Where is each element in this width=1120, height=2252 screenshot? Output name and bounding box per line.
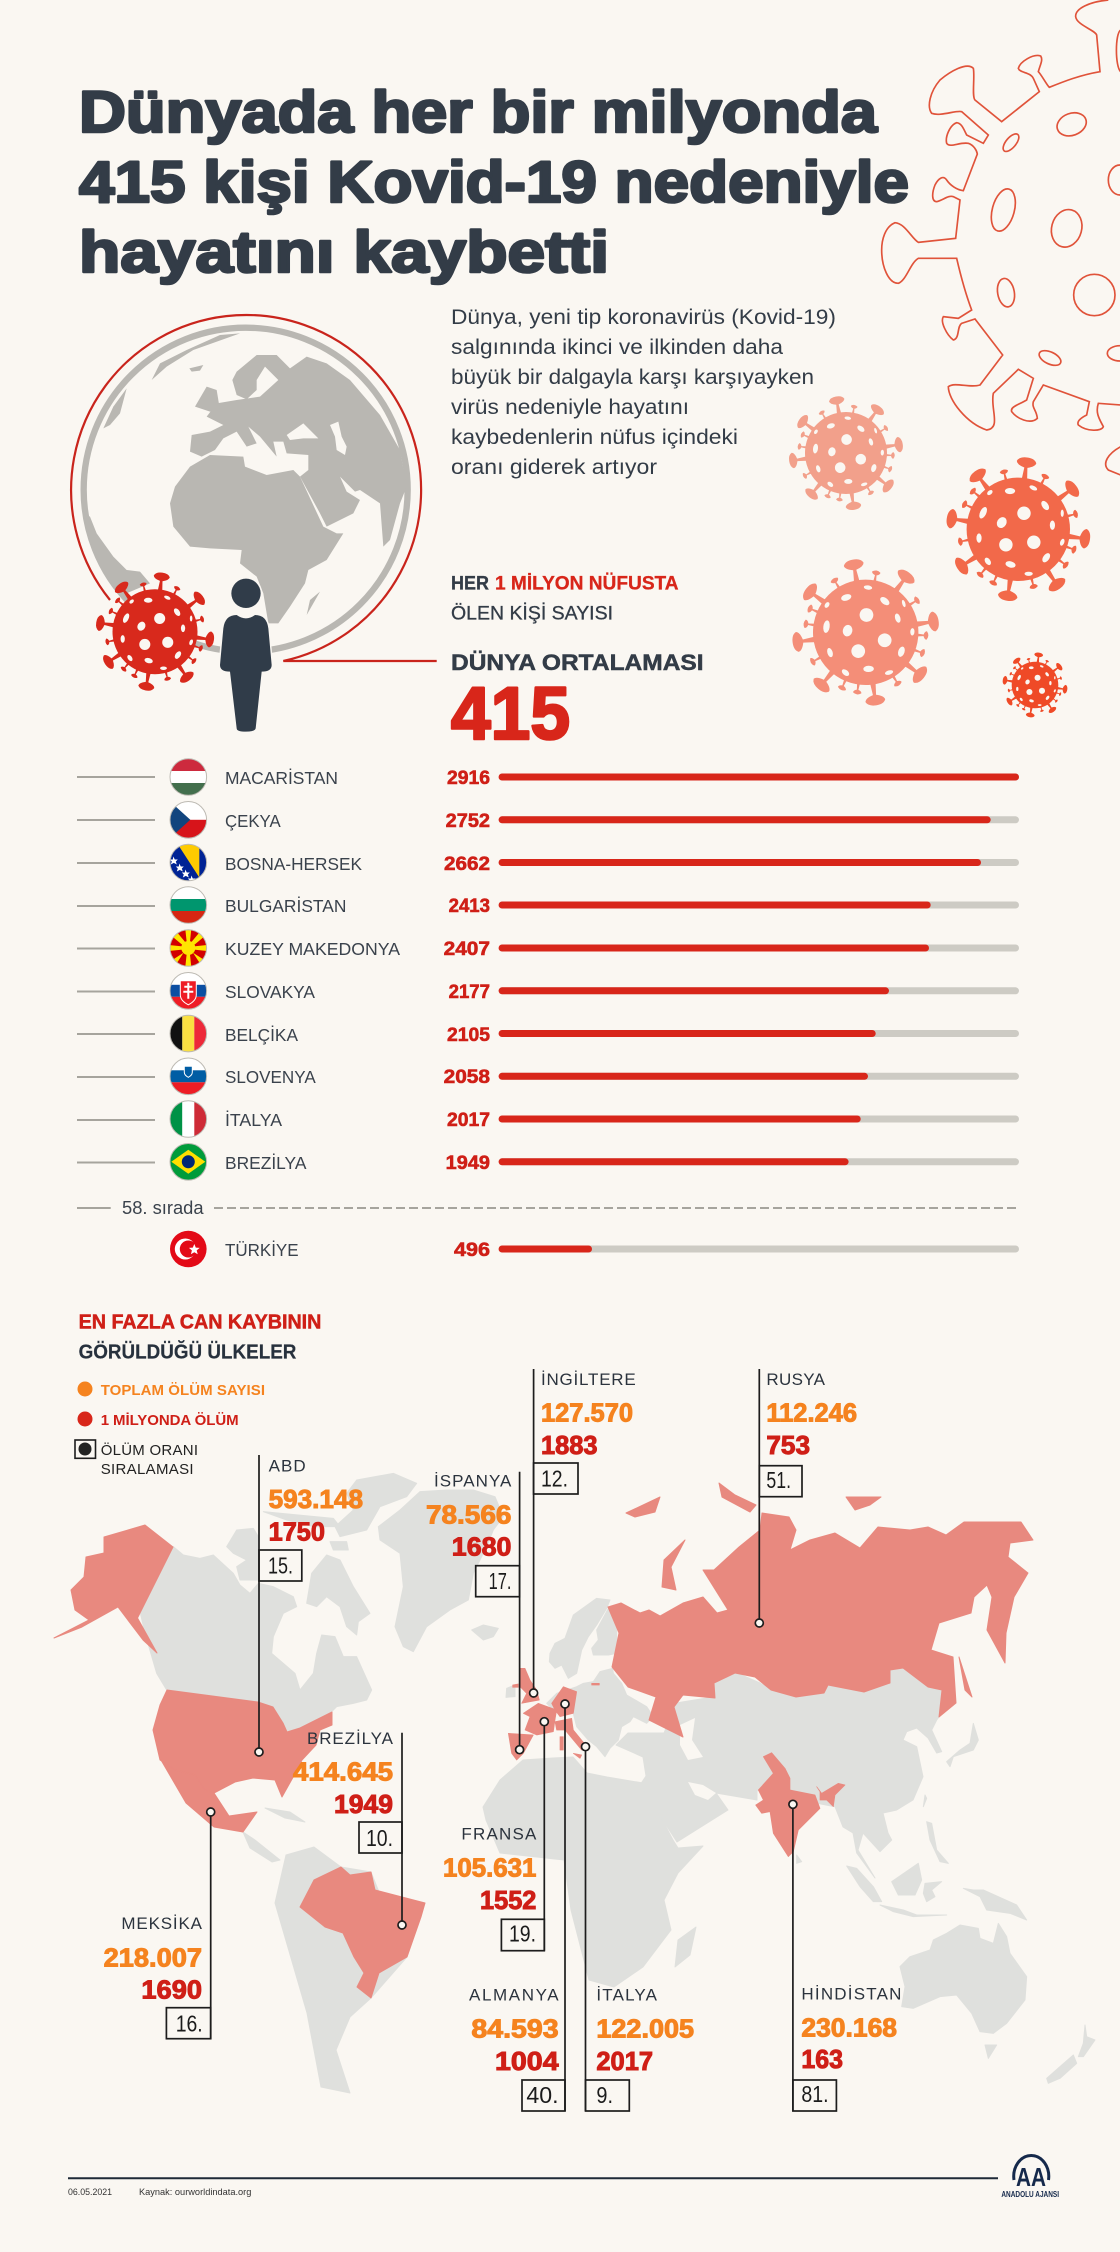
per-million heading (451, 574, 679, 624)
grey Europe (440, 1540, 653, 1757)
callout: Almanya: ALMANYA (469, 1986, 559, 2005)
callout: Brezilya: 10. (366, 1825, 393, 1851)
callout: Almanya: 1004 (495, 2046, 559, 2076)
row: Bosna-Hersek: BOSNA-HERSEK (225, 854, 362, 874)
callout: Fransa: FRANSA (461, 1824, 537, 1843)
callout: Meksika: 16. (176, 2011, 203, 2037)
callout: Rusya: 51. (766, 1467, 791, 1493)
row: Belçika: 2105 (447, 1025, 490, 1046)
callout: ABD: 593.148 (269, 1484, 363, 1514)
callout: Rusya: 112.246 (766, 1398, 857, 1428)
row: Çekya: ÇEKYA (225, 811, 281, 831)
callout: Hindistan: 163 (801, 2044, 843, 2074)
callout: İspanya: 1680 (452, 1532, 511, 1562)
map section heading: GÖRÜLDÜĞÜ ÜLKELER (79, 1339, 297, 1363)
row: Bulgaristan: 2413 (449, 896, 490, 917)
inland seas (680, 1718, 716, 1800)
title (79, 80, 909, 285)
footer (68, 2155, 1059, 2199)
callout: Almanya: 40. (526, 2082, 559, 2108)
row: İtalya (77, 1100, 1019, 1138)
legend: rank: SIRALAMASI (101, 1461, 194, 1478)
grey Asia Pacific (797, 1723, 1095, 2083)
callout: Fransa: 1552 (480, 1885, 536, 1915)
callout: ABD: ABD (269, 1457, 306, 1476)
callout: Hindistan: 230.168 (801, 2013, 897, 2043)
per-million heading: 1 MİLYON NÜFUSTA (495, 574, 679, 594)
callout: İngiltere: 127.570 (541, 1398, 633, 1428)
legend: total deaths: TOPLAM ÖLÜM SAYISI (101, 1382, 265, 1399)
world average value: 415 (451, 672, 570, 755)
intro paragraph: oranı giderek artıyor (451, 456, 657, 479)
highlighted countries: Europe (508, 1668, 599, 1760)
callout: Rusya: 753 (766, 1430, 810, 1460)
callout: İtalya: İTALYA (596, 1986, 658, 2005)
highlighted countries: Americas and Russia (54, 1483, 1033, 1998)
callout: İngiltere: İNGİLTERE (541, 1370, 636, 1389)
callout: Fransa: 105.631 (443, 1853, 536, 1883)
legend: rank: ÖLÜM ORANI (101, 1441, 198, 1459)
row: Brezilya: BREZİLYA (225, 1153, 307, 1173)
callout: Brezilya: 1949 (334, 1789, 393, 1819)
callout: ABD (255, 1455, 363, 1756)
legend (75, 1382, 265, 1478)
callout: Rusya (755, 1369, 857, 1627)
callout: Rusya: RUSYA (766, 1370, 826, 1389)
row: Kuzey Makedonya: KUZEY MAKEDONYA (225, 939, 400, 959)
source: Kaynak: ourworldindata.org (139, 2187, 251, 2198)
icon: orange virus (945, 456, 1091, 602)
date: 06.05.2021 (68, 2187, 112, 2198)
callout: İspanya: İSPANYA (434, 1472, 512, 1491)
row: Brezilya (77, 1143, 1019, 1181)
callout: İtalya: 9. (596, 2082, 613, 2108)
row: Bosna-Hersek (77, 844, 1019, 884)
row: Macaristan: 2916 (447, 768, 490, 789)
intro paragraph: virüs nedeniyle hayatını (451, 396, 689, 419)
row: Türkiye: TÜRKİYE (225, 1240, 299, 1260)
callout: İngiltere (530, 1369, 636, 1697)
intro paragraph: Dünya, yeni tip koronavirüs (Kovid-19) (451, 306, 836, 329)
intro paragraph: kaybedenlerin nüfus içindeki (451, 426, 738, 449)
callout: İspanya: 78.566 (426, 1499, 511, 1529)
row: İtalya: 2017 (447, 1110, 490, 1131)
row: Türkiye: 496 (454, 1240, 490, 1261)
world map (54, 1473, 1095, 2093)
logo: Anadolu Ajansı (1001, 2155, 1059, 2199)
row: Türkiye (169, 1230, 1019, 1268)
globe illustration (71, 315, 437, 732)
legend: deaths per million: 1 MİLYONDA ÖLÜM (101, 1412, 239, 1429)
row: Belçika: BELÇİKA (225, 1025, 298, 1045)
grey North America and Greenland (140, 1473, 503, 1732)
row: Macaristan (77, 758, 1019, 796)
person (220, 579, 272, 732)
callout: Meksika: 1690 (141, 1975, 202, 2005)
row: Brezilya: 1949 (446, 1153, 490, 1174)
callout: İngiltere: 12. (541, 1466, 568, 1492)
map section heading: EN FAZLA CAN KAYBININ (79, 1310, 321, 1333)
callout: ABD: 15. (268, 1552, 293, 1578)
callout: ABD: 1750 (269, 1517, 325, 1547)
row: Kuzey Makedonya (77, 929, 1019, 967)
title: hayatını kaybetti (79, 220, 609, 285)
callout: İtalya: 2017 (596, 2046, 653, 2076)
icon: salmon virus (773, 539, 959, 725)
world average label: DÜNYA ORTALAMASI (451, 650, 704, 675)
row: Belçika (77, 1015, 1019, 1053)
title: 415 kişi Kovid-19 nedeniyle (79, 150, 909, 215)
row: Bosna-Hersek: 2662 (444, 854, 490, 875)
highlighted country: India (756, 1753, 845, 1857)
callout: İtalya: 122.005 (596, 2014, 694, 2044)
callout: Hindistan: HİNDİSTAN (801, 1984, 901, 2003)
callout: Fransa (443, 1718, 548, 1951)
globe land and rim (83, 328, 408, 652)
callout: Almanya (469, 1700, 569, 2111)
callout: Brezilya: 414.645 (293, 1757, 393, 1787)
callout: Brezilya: BREZİLYA (307, 1729, 394, 1748)
row: Bulgaristan: BULGARİSTAN (225, 896, 346, 916)
intro paragraph: büyük bir dalgayla karşı karşıyayken (451, 366, 814, 389)
row: Slovenya (77, 1057, 1019, 1095)
per-million heading: ÖLEN KİŞİ SAYISI (451, 604, 613, 624)
icon: small red-orange virus (1002, 652, 1068, 718)
title: Dünyada her bir milyonda (79, 80, 878, 145)
intro paragraph: salgınında ikinci ve ilkinden daha (451, 336, 783, 359)
row: Bulgaristan (77, 886, 1019, 924)
callout: İspanya: 17. (489, 1568, 511, 1594)
row: Slovenya: 2058 (444, 1067, 490, 1088)
Turkey rank separator: 58. sırada (122, 1198, 205, 1218)
icon: red virus (95, 572, 215, 692)
row: Slovakya: SLOVAKYA (225, 982, 315, 1002)
row: Çekya (77, 801, 1019, 839)
callout: Almanya: 84.593 (471, 2014, 559, 2044)
grey Latin America, Africa and Asia (243, 1668, 942, 2093)
callout: Hindistan: 81. (801, 2081, 829, 2107)
logo: Anadolu Ajansı: AA (1016, 2162, 1046, 2192)
callout: Meksika: 218.007 (104, 1943, 202, 1973)
row: İtalya: İTALYA (225, 1110, 282, 1130)
callout: İngiltere: 1883 (541, 1430, 598, 1460)
row: Slovenya: SLOVENYA (225, 1067, 316, 1087)
icon: large outlined virus (882, 0, 1120, 475)
callout: Fransa: 19. (509, 1921, 536, 1947)
callout: Brezilya (293, 1729, 406, 1929)
callout: Hindistan (789, 1800, 901, 2111)
logo: Anadolu Ajansı: ANADOLU AJANSI (1001, 2189, 1059, 2199)
icon: pale virus (774, 381, 918, 525)
row: Kuzey Makedonya: 2407 (444, 939, 490, 960)
callout: İspanya (426, 1472, 524, 1754)
row: Macaristan: MACARİSTAN (225, 768, 338, 788)
intro paragraph (451, 306, 836, 479)
bar chart: deaths per million (77, 758, 1019, 1268)
row: Slovakya (77, 972, 1019, 1010)
row: Çekya: 2752 (446, 811, 490, 832)
per-million heading: HER (451, 574, 489, 594)
row: Slovakya: 2177 (449, 982, 490, 1003)
callout: Meksika (104, 1808, 215, 2039)
map section heading (79, 1310, 321, 1363)
legend: rank (75, 1440, 198, 1478)
red circle with leader line (71, 315, 437, 661)
callout: Meksika: MEKSİKA (121, 1914, 203, 1933)
callout: İtalya (582, 1743, 694, 2111)
